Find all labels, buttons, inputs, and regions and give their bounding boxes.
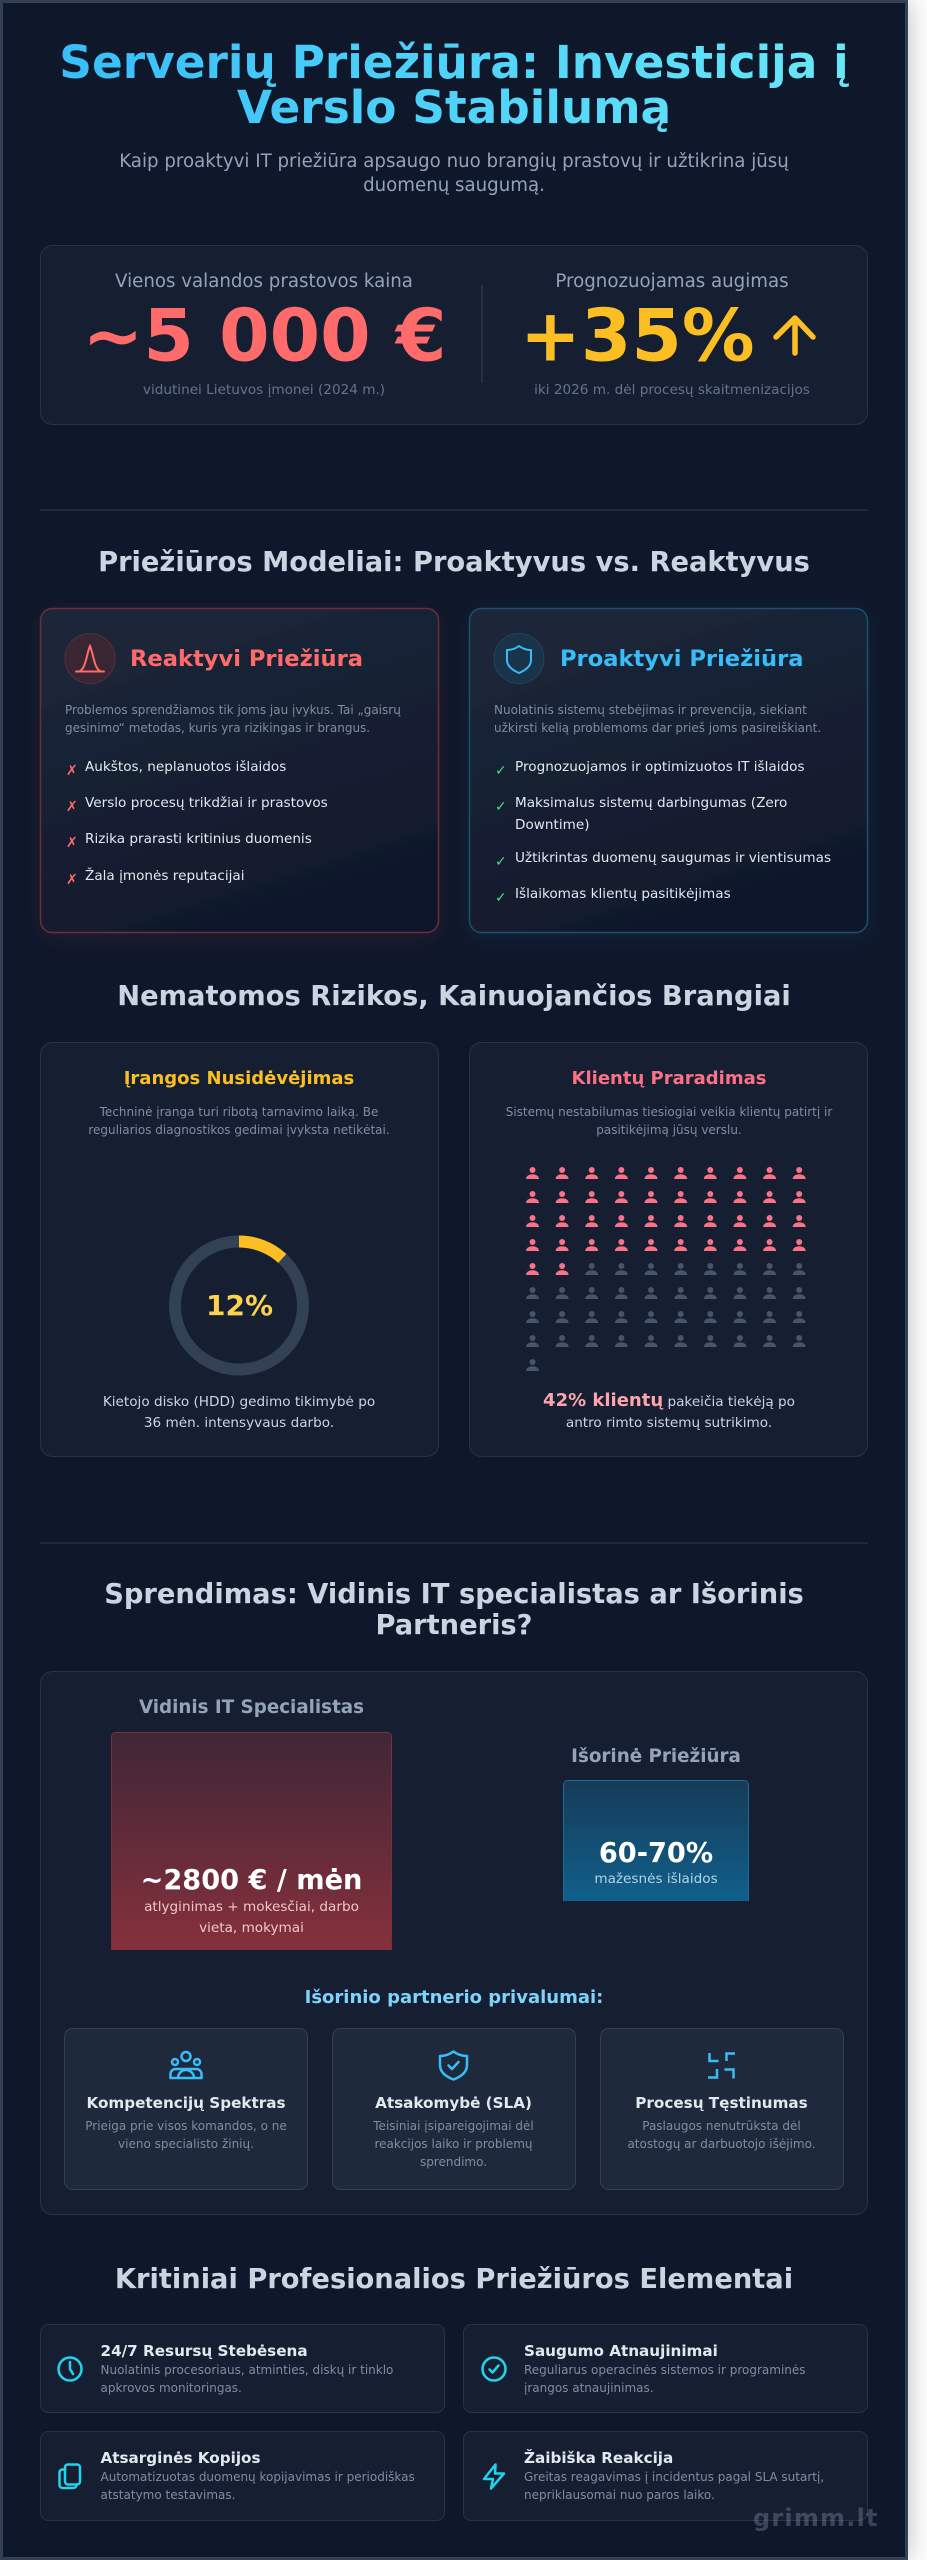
caption: antro rimto sistemų sutrikimo. [566, 1415, 772, 1431]
bar: external maintenance: mažesnės išlaidos [594, 1871, 718, 1887]
description: Problemos sprendžiamos tik joms jau įvykus. Tai „gaisrų [65, 703, 401, 717]
icon: check circle [482, 2358, 506, 2380]
subheading: Išorinio partnerio privalumai: [305, 1987, 603, 2008]
list of benefits: Užtikrintas duomenų saugumas ir vientisumas [515, 850, 831, 866]
stat: projected growth: iki 2026 m. dėl procesų skaitmenizacijos [534, 382, 810, 398]
description [65, 703, 401, 735]
bar: in-house specialist: Vidinis IT Specialistas [139, 1697, 364, 1718]
panel: equipment wear [40, 1042, 438, 1456]
card: rapid response [464, 2432, 868, 2520]
heading: decision [104, 1579, 804, 1641]
panel: proactive maintenance: Proaktyvi Priežiūra [560, 646, 804, 672]
bar: in-house specialist: atlyginimas + mokesčiai, darbo [144, 1899, 359, 1915]
list of benefits: Maksimalus sistemų darbingumas (Zero [515, 795, 787, 811]
stat: downtime cost: vidutinei Lietuvos įmonei (2024 m.) [143, 382, 385, 398]
list of benefits: ✓ [495, 799, 507, 815]
icon: shield [494, 634, 544, 684]
panel: customer loss: Klientų Praradimas [572, 1068, 766, 1089]
caption: 36 mėn. intensyvaus darbo. [144, 1415, 334, 1431]
list of benefits: Prognozuojamos ir optimizuotos IT išlaidos [515, 759, 805, 775]
card: responsibility: sprendimo. [420, 2155, 487, 2169]
description: reguliarios diagnostikos gedimai įvyksta netikėtai. [88, 1123, 390, 1137]
list of benefits [495, 759, 831, 906]
card: competence: Prieiga prie visos komandos, o ne [85, 2119, 287, 2133]
card: monitoring: apkrovos monitoringas. [100, 2381, 242, 2395]
caption [103, 1394, 375, 1431]
panel: equipment wear: Įrangos Nusidėvėjimas [124, 1068, 354, 1089]
icon: copies [60, 2464, 80, 2488]
icon grid: 42 of 81 customers lost [526, 1167, 806, 1371]
card: monitoring [40, 2324, 444, 2412]
card: security updates: Reguliarus operacinės sistemos ir programinės [524, 2363, 806, 2377]
panel: cost comparison [40, 1672, 868, 2214]
description: gesinimo“ metodas, kuris yra rizikingas ir brangus. [65, 721, 370, 735]
bar: external maintenance [563, 1746, 749, 1901]
card: competence: vieno specialisto žinių. [118, 2137, 254, 2151]
list of drawbacks: ✗ [66, 799, 78, 815]
description: Nuolatinis sistemų stebėjimas ir prevencija, siekiant [494, 703, 807, 717]
list of drawbacks: ✗ [66, 872, 78, 888]
card: backups: Atsarginės Kopijos [100, 2449, 261, 2467]
bar: in-house specialist: ~2800 € / mėn [141, 1865, 362, 1896]
card: monitoring: Nuolatinis procesoriaus, atminties, diskų ir tinklo [100, 2363, 393, 2377]
card: rapid response: Greitas reagavimas į incidentus pagal SLA sutartį, [524, 2470, 824, 2484]
card: responsibility [332, 2028, 576, 2190]
bar: external maintenance: 60-70% [599, 1838, 713, 1869]
card: rapid response: nepriklausomai nuo paros laiko. [524, 2488, 715, 2502]
panel: key statistics [40, 246, 868, 424]
bar: in-house specialist: vieta, mokymai [199, 1920, 304, 1936]
bar: external maintenance: Išorinė Priežiūra [571, 1746, 741, 1767]
stat: projected growth: +35% [520, 294, 755, 378]
stat: downtime cost: ~5 000 € [83, 294, 446, 378]
card: responsibility: Atsakomybė (SLA) [375, 2094, 532, 2112]
caption: Kietojo disko (HDD) gedimo tikimybė po [103, 1394, 375, 1410]
bar: in-house specialist [111, 1697, 392, 1950]
card: responsibility: reakcijos laiko ir problemų [374, 2137, 533, 2151]
heading: risks: Nematomos Rizikos, Kainuojančios Brangiai [117, 981, 791, 1012]
card: competence: Kompetencijų Spektras [86, 2094, 286, 2112]
card: responsibility: Teisiniai įsipareigojimai dėl [372, 2119, 534, 2133]
description [494, 703, 821, 735]
icon: team [170, 2052, 202, 2078]
title [59, 36, 849, 134]
description [88, 1105, 390, 1137]
card: backups: Automatizuotas duomenų kopijavimas ir periodiškas [100, 2470, 415, 2484]
description: Sistemų nestabilumas tiesiogiai veikia klientų patirtį ir [506, 1105, 832, 1119]
list of drawbacks: Žala įmonės reputacijai [85, 866, 244, 884]
subtitle [119, 151, 789, 196]
list of drawbacks: ✗ [66, 763, 78, 779]
description: Techninė įranga turi ribotą tarnavimo laiką. Be [99, 1105, 378, 1119]
card: continuity: atostogų ar darbuotojo išėjimo. [627, 2137, 816, 2151]
heading: decision: Partneris? [375, 1610, 533, 1641]
heading: critical elements: Kritiniai Profesionalios Priežiūros Elementai [115, 2264, 793, 2295]
donut chart: 12% [175, 1242, 303, 1370]
card: competence [64, 2028, 308, 2190]
card: backups: atstatymo testavimas. [100, 2488, 235, 2502]
subtitle: Kaip proaktyvi IT priežiūra apsaugo nuo brangių prastovų ir užtikrina jūsų [119, 151, 789, 172]
list of benefits: Downtime) [515, 817, 590, 833]
description: užkirsti kelią problemoms dar prieš joms pasireiškiant. [494, 721, 821, 735]
icon: lightning bolt [484, 2464, 504, 2488]
card: security updates [464, 2324, 868, 2412]
subtitle: duomenų saugumą. [363, 175, 545, 196]
icon: up arrow [776, 318, 813, 353]
description: pasitikėjimą jūsų verslu. [596, 1123, 742, 1137]
list of drawbacks: ✗ [66, 835, 78, 851]
list of benefits: ✓ [495, 854, 507, 870]
stat: projected growth [520, 271, 810, 398]
card: continuity: Paslaugos nenutrūksta dėl [642, 2119, 801, 2133]
heading: decision: Sprendimas: Vidinis IT specialistas ar Išorinis [104, 1579, 804, 1610]
icon: shield check [440, 2052, 467, 2080]
icon: clock [58, 2358, 82, 2380]
card: monitoring: 24/7 Resursų Stebėsena [100, 2342, 308, 2360]
description [506, 1105, 832, 1137]
card: security updates: įrangos atnaujinimas. [524, 2381, 654, 2395]
list of drawbacks: Verslo procesų trikdžiai ir prastovos [85, 795, 328, 811]
heading: models: Priežiūros Modeliai: Proaktyvus vs. Reaktyvus [98, 547, 810, 578]
icon: fire peak [65, 634, 115, 684]
card: continuity: Procesų Tęstinumas [635, 2094, 808, 2112]
list of benefits: ✓ [495, 890, 507, 906]
list of drawbacks [66, 759, 328, 888]
panel: proactive maintenance [470, 608, 868, 932]
caption [543, 1390, 795, 1431]
list of benefits: ✓ [495, 763, 507, 779]
title: Verslo Stabilumą [237, 81, 671, 134]
watermark: grimm.lt [753, 2504, 879, 2532]
list of benefits: Išlaikomas klientų pasitikėjimas [515, 886, 731, 902]
card: backups [40, 2432, 444, 2520]
list of drawbacks: Aukštos, neplanuotos išlaidos [85, 759, 286, 775]
list of drawbacks: Rizika prarasti kritinius duomenis [85, 831, 312, 847]
card: continuity [600, 2028, 844, 2190]
donut chart: 12%: 12% [206, 1289, 273, 1322]
panel: reactive maintenance: Reaktyvi Priežiūra [130, 646, 363, 672]
stat: downtime cost [83, 271, 446, 398]
stat: projected growth: Prognozuojamas augimas [555, 271, 789, 292]
caption: 42% klientų pakeičia tiekėją po [543, 1390, 795, 1411]
panel: reactive maintenance [40, 608, 438, 932]
stat: downtime cost: Vienos valandos prastovos kaina [115, 271, 413, 292]
panel: customer loss [470, 1042, 868, 1456]
title: Serverių Priežiūra: Investicija į [59, 36, 849, 89]
icon: corners [708, 2053, 735, 2078]
card: rapid response: Žaibiška Reakcija [524, 2448, 673, 2467]
card: security updates: Saugumo Atnaujinimai [524, 2342, 718, 2360]
